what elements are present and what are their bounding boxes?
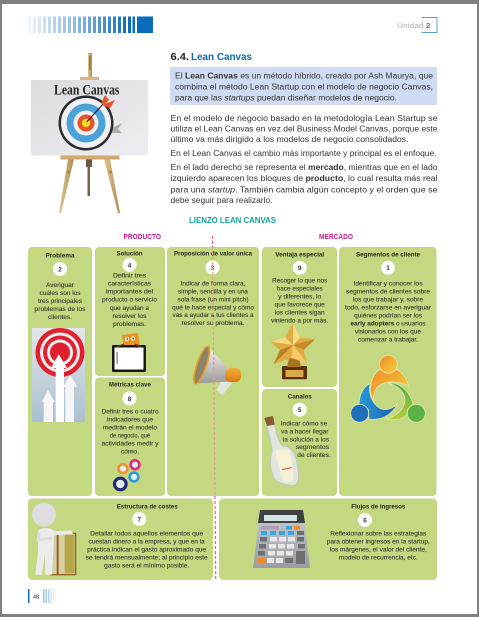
label: mercado: MERCADO <box>319 234 354 241</box>
panel: solucion: problemas. <box>113 321 146 328</box>
body text: En el modelo de negocio basado en la metodología Lean Startup se <box>170 114 438 123</box>
illustration: easel with Lean Canvas target: Lean Canvas <box>54 82 120 98</box>
panel: proposicion de valor unica: resolver su problema. <box>182 320 245 327</box>
panel: canales: Canales <box>288 394 312 401</box>
panel: metricas clave: Definir tres o cuatro <box>102 409 159 416</box>
unit label: Unidad 2 <box>397 21 430 30</box>
panel: solucion: resolver los <box>112 313 146 320</box>
panel: solucion: Definir tres <box>113 273 146 280</box>
panel: flujos de ingresos: Reflexionar sobre las estrategias <box>330 531 426 538</box>
section heading: Lean Canvas <box>191 52 252 63</box>
body text: En el lado derecho se representa el mercado , mientras que en el lado <box>170 163 438 172</box>
panel: canales: va a hacer llegar <box>281 429 328 436</box>
panel: segmentos de cliente <box>339 247 436 496</box>
panel: solucion: importantes del <box>106 289 153 296</box>
icon: character with tablet <box>112 333 146 372</box>
panel: solucion: 4 <box>128 262 132 269</box>
panel: solucion: Solución <box>116 251 143 258</box>
panel: metricas clave: 8 <box>128 396 132 403</box>
highlighted intro: para que las startups puedan diseñar modelos de negocio. <box>175 94 397 102</box>
header stripe band <box>28 16 153 33</box>
panel: ventaja especial: que favorece que <box>275 302 325 309</box>
panel: ventaja especial: los clientes sigan <box>275 310 325 317</box>
panel: solucion: características <box>108 281 151 288</box>
chart title: LIENZO LEAN CANVAS <box>189 216 277 225</box>
footer page number: 48 <box>33 594 39 600</box>
panel: flujos de ingresos: 6 <box>363 517 367 524</box>
panel: canales <box>262 389 337 496</box>
panel: ventaja especial: 9 <box>298 265 302 272</box>
panel: flujos de ingresos <box>219 498 437 580</box>
panel: estructura de costes: Detallar todos aquellos elementos que <box>90 531 204 538</box>
panel: proposicion de valor unica: 3 <box>211 265 215 272</box>
unit label <box>397 18 437 32</box>
panel: proposicion de valor unica: simple, sencilla y en una <box>178 288 249 296</box>
panel: canales: segmentos <box>296 444 329 451</box>
section heading: 6.4. <box>170 52 189 63</box>
panel: problema: tres principales <box>38 298 82 305</box>
icon: figure with abacus <box>32 503 76 575</box>
panel: proposicion de valor unica: sola frase (un mini pitch) <box>178 296 248 304</box>
panel: problema: Averiguar <box>46 282 74 289</box>
icon: star trophy <box>270 323 315 379</box>
panel: segmentos de cliente: Segmentos de cliente <box>356 252 420 259</box>
panel: canales: 5 <box>298 407 302 414</box>
panel: estructura de costes: gasto será el mínimo posible. <box>104 562 189 570</box>
panel: proposicion de valor unica: vas a ayudar a tus clientes a <box>172 312 254 319</box>
panel: ventaja especial <box>262 247 337 387</box>
panel: metricas clave <box>95 378 165 496</box>
icon: calculator <box>253 510 310 568</box>
label: producto: PRODUCTO <box>124 234 162 241</box>
panel: segmentos de cliente: Identificar y conocer los <box>354 281 422 288</box>
panel: ventaja especial: Ventaja especial <box>275 251 324 258</box>
panel: segmentos de cliente: 1 <box>386 265 390 272</box>
icon: message in a bottle <box>264 416 299 485</box>
panel: metricas clave: Métricas clave <box>109 382 151 389</box>
panel: problema: cuáles son los <box>40 290 80 297</box>
panel: estructura de costes: Estructura de costes <box>117 504 178 510</box>
body text: para una startup . También cambia algún concepto y el orden que se <box>170 186 438 194</box>
panel: canales: de clientes. <box>297 452 331 459</box>
panel: flujos de ingresos: los márgenes, el valor del cliente, <box>330 546 427 554</box>
panel: problema <box>28 247 92 496</box>
footer page number <box>28 589 56 603</box>
body text: último va más dirigido a los modelos de negocio consolidados. <box>170 135 408 144</box>
panel: flujos de ingresos: Flujos de ingresos <box>351 504 406 510</box>
panel: solucion: que ayudan a <box>110 305 150 312</box>
panel: segmentos de cliente: los que trabajar y, sobre <box>353 297 424 304</box>
body text: debe seguir para realizarlo. <box>170 196 272 205</box>
panel: flujos de ingresos: para obtener ingresos en la startup, <box>327 538 430 546</box>
panel: proposicion de valor unica: Indicar de forma clara, <box>180 280 246 287</box>
panel: problema: problemas de los <box>34 306 86 313</box>
highlighted intro: El Lean Canvas es un método híbrido, creado por Ash Maurya, que <box>175 72 434 80</box>
panel: segmentos de cliente: todo, esforzarse en averiguar <box>345 305 431 312</box>
body text: En el Lean Canvas el cambio más importante y principal es el enfoque. <box>170 149 436 158</box>
panel: problema: Problema <box>46 253 75 260</box>
panel: solucion: producto o servicio <box>102 297 158 304</box>
highlighted intro <box>170 67 437 105</box>
panel: metricas clave: indicadores que <box>107 416 154 424</box>
panel: canales: Indicar cómo se <box>281 421 328 428</box>
body text <box>170 114 438 205</box>
illustration: easel with Lean Canvas target <box>31 53 148 213</box>
panel: ventaja especial: hace especiales <box>277 286 323 293</box>
panel: ventaja especial: y diferentes, lo <box>278 294 322 301</box>
panel: solucion <box>95 247 165 376</box>
panel: metricas clave: de negocio, qué <box>110 432 150 440</box>
highlighted intro: combina el método Lean Startup con el modelo de negocio Canvas, <box>175 82 433 92</box>
panel: segmentos de cliente: visionarios con los que <box>355 329 422 336</box>
panel: proposicion de valor unica: qué te hace especial y cómo <box>172 304 255 312</box>
icon: three people circle <box>351 355 425 422</box>
panel: metricas clave: actividades medir y <box>102 440 159 448</box>
icon: gears <box>114 460 139 490</box>
panel: proposicion de valor unica <box>167 247 259 496</box>
panel: estructura de costes: práctica indican el gasto aproximado que <box>87 546 207 554</box>
divider: dashed product / market line <box>212 236 216 580</box>
panel: estructura de costes: cuestan dinero a la empresa, y que en la <box>89 538 205 546</box>
panel: ventaja especial: viniendo a por más. <box>271 318 328 324</box>
panel: estructura de costes: 7 <box>138 516 142 523</box>
panel: ventaja especial: Recoger lo que nos <box>272 278 327 285</box>
panel: problema: clientes. <box>48 314 72 321</box>
panel: segmentos de cliente: quiénes podrían ser los <box>354 313 422 320</box>
panel: metricas clave: cómo. <box>121 448 139 456</box>
panel: segmentos de cliente: segmentos de clientes sobre <box>346 289 431 296</box>
panel: flujos de ingresos: modelo de recurrencia, etc. <box>339 554 418 562</box>
body text: izquierdo aparecen los bloques de producto , lo cual resulta más real <box>170 174 438 183</box>
icon: megaphone <box>191 345 241 395</box>
panel: estructura de costes: se tendrá mensualmente; al principio este <box>86 554 208 562</box>
panel: estructura de costes <box>28 498 213 580</box>
panel: canales: la solución a los <box>283 437 329 444</box>
panel: segmentos de cliente: early adopters o usuarios <box>350 321 426 328</box>
panel: proposicion de valor unica: Proposición de valor única <box>174 251 252 258</box>
panel: segmentos de cliente: comenzar a trabajar. <box>358 337 418 344</box>
icon: target with arrows <box>32 328 85 422</box>
panel: metricas clave: medirán el modelo <box>103 424 158 432</box>
body text: utiliza el Lean Canvas en vez del Business Model Canvas, porque este <box>170 124 438 134</box>
panel: problema: 2 <box>58 266 62 273</box>
